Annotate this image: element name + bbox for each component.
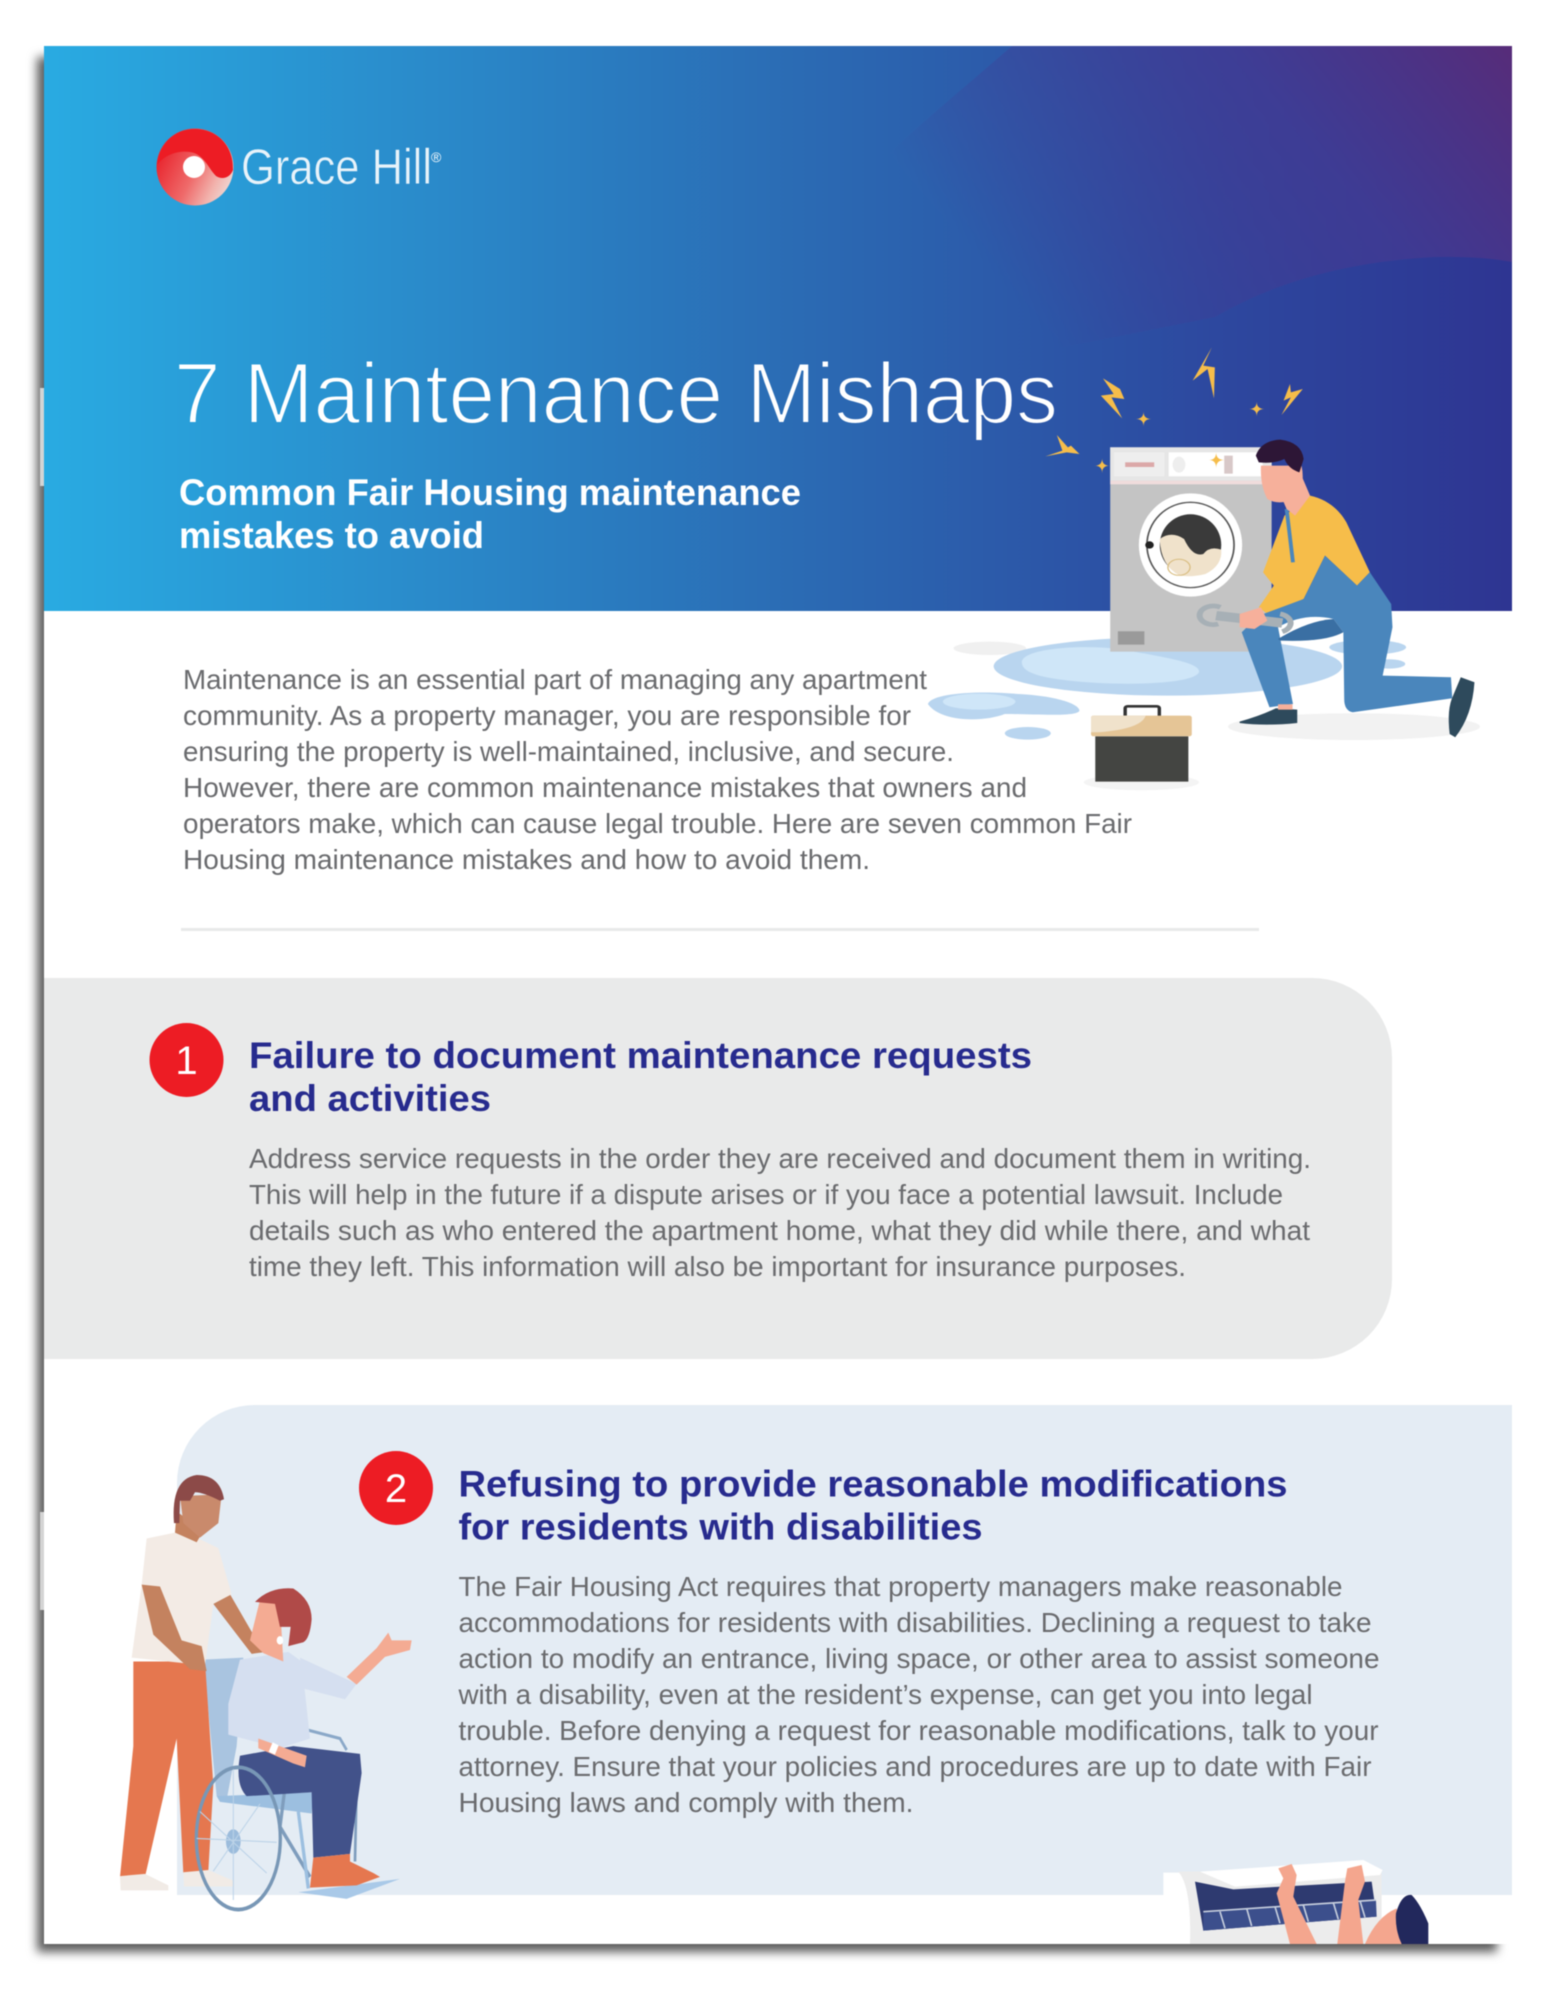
heading 2: for residents with disabilities [458, 1506, 982, 1548]
header banner [44, 46, 1512, 611]
body 2: with a disability, even at the resident’s expense, can get you into legal [458, 1679, 1313, 1710]
intro paragraph: However, there are common maintenance mistakes that owners and [183, 772, 1027, 803]
intro paragraph: ensuring the property is well-maintained, inclusive, and secure. [183, 736, 954, 767]
technician [1200, 440, 1474, 737]
intro paragraph: operators make, which can cause legal trouble. Here are seven common Fair [183, 808, 1132, 839]
floor shadow under technician [1228, 713, 1480, 740]
wheelchair frame [203, 1658, 400, 1899]
toolbox [1084, 706, 1199, 790]
panel: mishap 2 [177, 1405, 1512, 1895]
body 1: details such as who entered the apartment home, what they did while there, and what [249, 1215, 1310, 1246]
raised arms and head [1277, 1864, 1428, 1944]
purple corner swoosh [849, 46, 1512, 360]
number badge 1 [150, 1023, 224, 1097]
logo wordmark: Grace Hill [241, 139, 432, 195]
number badge 1: 1 [175, 1039, 198, 1083]
subtitle [179, 472, 801, 556]
body 1: time they left. This information will also be important for insurance purposes. [249, 1251, 1186, 1282]
intro paragraph: Maintenance is an essential part of managing any apartment [183, 664, 927, 695]
body 2: accommodations for residents with disabilities. Declining a request to take [458, 1607, 1372, 1638]
number badge 2 [359, 1451, 433, 1525]
subtitle: Common Fair Housing maintenance [179, 472, 801, 513]
head [1256, 440, 1310, 516]
shoes [1240, 708, 1297, 725]
illustration: technician fixing leaking washing machine [928, 347, 1480, 790]
torso and arm [1259, 496, 1370, 616]
body 2: Housing laws and comply with them. [458, 1787, 914, 1818]
logo mark [156, 128, 234, 206]
heading 2 [458, 1462, 1288, 1548]
heading 1: and activities [249, 1077, 491, 1119]
overalls [1242, 556, 1452, 712]
wrench [1200, 606, 1291, 632]
title: 7 Maintenance Mishaps [174, 346, 1058, 442]
illustration: man pushing woman in wheelchair [120, 1475, 412, 1910]
body 1: Address service requests in the order they are received and document them in writing. [249, 1143, 1311, 1174]
illustration: technician servicing air conditioner [1163, 1860, 1428, 1944]
intro paragraph: community. As a property manager, you are responsible for [183, 700, 911, 731]
water puddles [928, 637, 1406, 740]
number badge 2: 2 [385, 1467, 407, 1511]
body 2: attorney. Ensure that your policies and procedures are up to date with Fair [458, 1751, 1372, 1782]
logo [156, 128, 442, 206]
man [120, 1475, 267, 1890]
wheelchair wheel [196, 1767, 280, 1910]
heading 2: Refusing to provide reasonable modifications [458, 1462, 1288, 1504]
body 2: trouble. Before denying a request for reasonable modifications, talk to your [458, 1715, 1378, 1746]
subtitle: mistakes to avoid [179, 515, 484, 556]
intro paragraph: Housing maintenance mistakes and how to avoid them. [183, 844, 870, 875]
body 2 [458, 1571, 1380, 1818]
heading 1 [249, 1034, 1032, 1119]
intro paragraph [183, 664, 1132, 875]
woman [228, 1588, 412, 1888]
body 2: action to modify an entrance, living space, or other area to assist someone [458, 1643, 1380, 1674]
body 1 [249, 1143, 1311, 1282]
body 2: The Fair Housing Act requires that property managers make reasonable [458, 1571, 1342, 1602]
washing machine [1110, 447, 1272, 652]
logo wordmark: ® [431, 149, 442, 165]
heading 1: Failure to document maintenance requests [249, 1034, 1032, 1076]
body 1: This will help in the future if a dispute arises or if you face a potential lawsuit. Include [249, 1179, 1283, 1210]
air conditioner unit [1163, 1860, 1383, 1944]
hand [1240, 607, 1267, 629]
panel: mishap 1 [44, 978, 1392, 1359]
icon: lightning bolts and sparkles [1045, 347, 1303, 473]
